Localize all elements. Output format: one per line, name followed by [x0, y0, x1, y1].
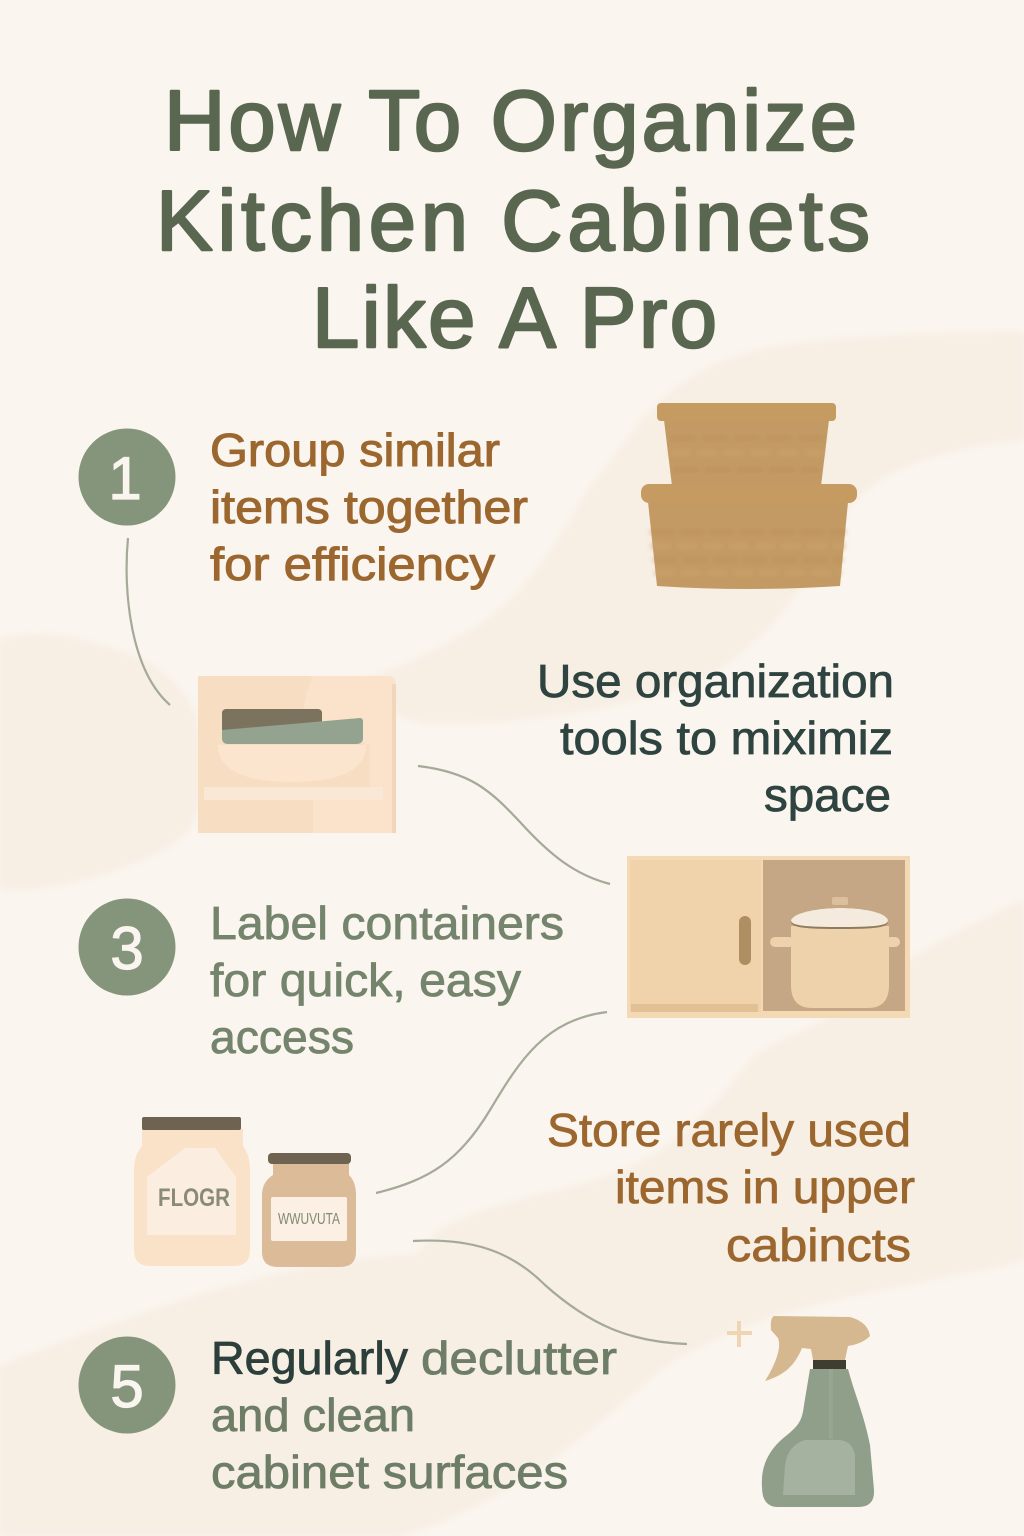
connector: cabinet to jars: [376, 1012, 607, 1193]
step 5 text: Regularly: [211, 1332, 408, 1384]
background wave: left: [0, 635, 205, 890]
step 4 text: items in upper: [615, 1161, 915, 1213]
step 1 text: Group similar: [210, 424, 500, 476]
icon: spray bottle: [727, 1316, 874, 1507]
step 5 badge: [78, 1336, 176, 1434]
icon: labelled jars: [134, 1117, 356, 1267]
step 1 badge: [78, 428, 176, 526]
connector: jars to spray: [413, 1241, 687, 1344]
step 4 text: cabincts: [726, 1219, 911, 1271]
title: Like A Pro: [312, 271, 717, 366]
connector: organizer to cabinet: [418, 766, 610, 884]
step 5 text: declutter: [421, 1332, 617, 1384]
step 2 text: space: [764, 769, 891, 821]
title: Kitchen Cabinets: [156, 174, 870, 269]
step 3 text: Label containers: [210, 897, 564, 949]
step 5 text: [211, 1332, 617, 1498]
icon: drawer organizer: [198, 676, 396, 833]
step 3 text: access: [210, 1011, 354, 1063]
icon: labelled jars: WWUVUTA: [278, 1211, 340, 1228]
step 1 badge: 1: [108, 445, 142, 512]
step 2 text: Use organization: [537, 655, 894, 707]
step 3 text: for quick, easy: [210, 954, 521, 1006]
step 5 badge: 5: [110, 1353, 144, 1420]
icon: cabinet with pot: [627, 856, 910, 1018]
step 2 text: [537, 655, 894, 821]
connector: step 1 to organizer: [127, 538, 170, 705]
step 2 text: tools to miximiz: [560, 712, 893, 764]
background wave: upper diagonal band: [330, 332, 1024, 722]
step 1 text: [210, 424, 528, 590]
step 5 text: cabinet surfaces: [211, 1446, 568, 1498]
step 4 text: Store rarely used: [547, 1104, 911, 1156]
step 1 text: for efficiency: [210, 538, 495, 590]
background wave: lower band: [0, 900, 1024, 1536]
icon: labelled jars: FLOGR: [158, 1184, 230, 1212]
step 5 text: and clean: [211, 1389, 415, 1441]
step 3 badge: 3: [110, 915, 144, 982]
step 3 badge: [78, 898, 176, 996]
title: How To Organize: [164, 74, 857, 169]
icon: stacked baskets: [641, 403, 857, 589]
step 3 text: [210, 897, 564, 1063]
title: [156, 74, 870, 366]
step 1 text: items together: [210, 481, 528, 533]
step 4 text: [547, 1104, 915, 1271]
